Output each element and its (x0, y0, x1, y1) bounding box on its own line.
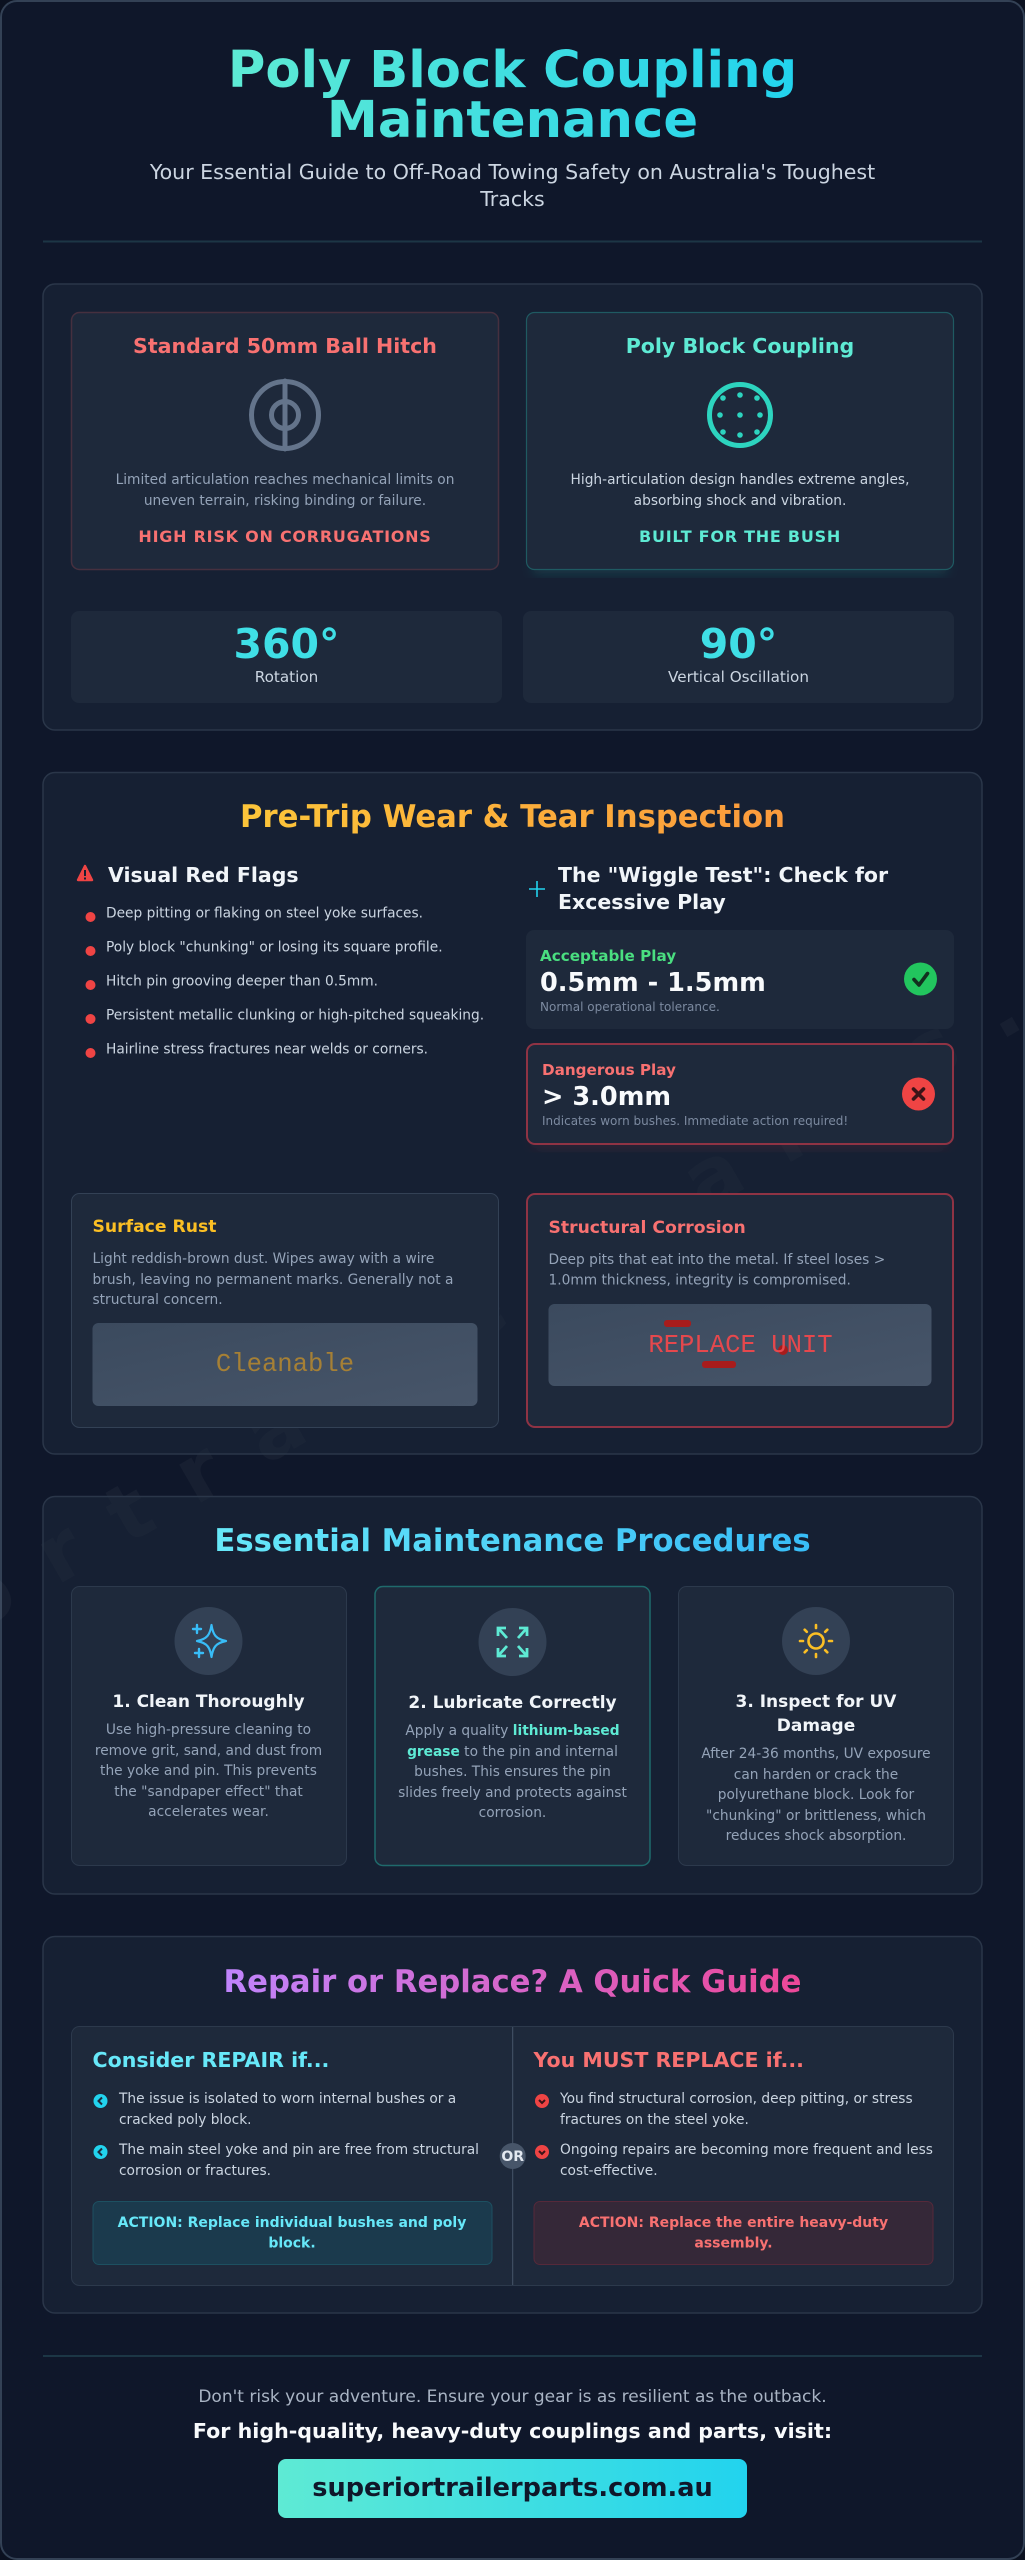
card: inspect for uv damage: polyurethane block. Look for (718, 1787, 915, 1803)
website button: superiortrailerparts.com.au (312, 2473, 713, 2503)
wiggle test (526, 863, 954, 1148)
card: standard 50mm ball hitch: Standard 50mm Ball Hitch (133, 334, 437, 358)
visual red flags: Visual Red Flags (108, 863, 299, 887)
action: repair: ACTION: Replace individual bushes and poly (118, 2215, 466, 2231)
action: replace: ACTION: Replace the entire heavy-duty (579, 2215, 888, 2231)
wiggle test: The "Wiggle Test": Check for (558, 863, 889, 887)
card: poly block coupling: BUILT FOR THE BUSH (639, 527, 841, 546)
column: repair: The main steel yoke and pin are free from structural (118, 2142, 479, 2158)
column: repair: The issue is isolated to worn internal bushes or a (118, 2091, 456, 2107)
icon: poly block (710, 384, 770, 446)
card: poly block coupling (526, 312, 954, 574)
or badge (500, 2143, 526, 2169)
panel: hitch comparison (43, 284, 982, 730)
card: clean thoroughly: remove grit, sand, and dust from (95, 1743, 322, 1759)
dangerous play: Indicates worn bushes. Immediate action required! (542, 1114, 848, 1128)
dangerous play (527, 1044, 953, 1148)
column: replace: fractures on the steel yoke. (560, 2112, 749, 2128)
panel: pre-trip inspection (43, 772, 982, 1454)
card: lubricate correctly: 2. Lubricate Correctly (408, 1693, 617, 1713)
card: surface rust (72, 1194, 498, 1428)
card: clean thoroughly (72, 1586, 346, 1866)
card: surface rust: structural concern. (92, 1292, 223, 1308)
column: repair: Consider REPAIR if... (92, 2048, 329, 2072)
visual red flags (78, 863, 484, 1058)
icon: plus (529, 881, 545, 897)
acceptable play (526, 930, 954, 1029)
swatch: cleanable: Cleanable (216, 1350, 354, 1379)
card: clean thoroughly: the "sandpaper effect" that (114, 1784, 303, 1800)
swatch: replace unit: REPLACE UNIT (648, 1331, 833, 1360)
heading: Repair or Replace? A Quick Guide (224, 1965, 801, 2000)
card: poly block coupling: absorbing shock and vibration. (634, 493, 846, 509)
card: lubricate correctly: corrosion. (479, 1805, 546, 1821)
acceptable play: Acceptable Play (540, 947, 676, 965)
card: standard 50mm ball hitch: Limited articulation reaches mechanical limits on (116, 472, 454, 488)
subtitle: Your Essential Guide to Off-Road Towing Safety on Australia's Toughest (149, 160, 875, 184)
icon: cross (902, 1078, 935, 1110)
card: lubricate correctly (375, 1586, 650, 1866)
title (228, 40, 797, 150)
card: standard 50mm ball hitch (72, 312, 498, 570)
title: Poly Block Coupling (228, 40, 797, 100)
card: lubricate correctly: bushes. This ensures the pin (414, 1764, 611, 1780)
card: inspect for uv damage: can harden or crack the (734, 1767, 898, 1783)
icon: check (904, 962, 937, 996)
icon: repair bullet (94, 2094, 108, 2108)
card: surface rust: brush, leaving no permanent marks. Generally not a (92, 1272, 453, 1288)
icon: repair bullet (94, 2145, 108, 2159)
card: poly block coupling: Poly Block Coupling (626, 334, 854, 358)
stat: vertical oscillation: Vertical Oscillation (668, 668, 809, 686)
card: structural corrosion: Deep pits that eat into the metal. If steel loses > (548, 1252, 885, 1268)
icon: expand arrows (478, 1608, 546, 1676)
card: clean thoroughly: Use high-pressure cleaning to (106, 1722, 311, 1738)
card: inspect for uv damage: reduces shock absorption. (726, 1828, 906, 1844)
column: replace: You MUST REPLACE if... (532, 2048, 804, 2072)
heading: Essential Maintenance Procedures (214, 1524, 811, 1559)
swatch: cleanable (92, 1323, 478, 1406)
title: Maintenance (327, 90, 698, 150)
header (149, 40, 875, 211)
card: inspect for uv damage: After 24-36 months, UV exposure (701, 1746, 931, 1762)
icon: warning triangle (78, 866, 92, 880)
website button (278, 2459, 747, 2518)
card: lubricate correctly: slides freely and protects against (398, 1785, 627, 1801)
action: repair (93, 2202, 492, 2264)
action: replace: assembly. (694, 2236, 773, 2252)
card: poly block coupling: High-articulation design handles extreme angles, (571, 472, 909, 488)
card: standard 50mm ball hitch: uneven terrain, risking binding or failure. (144, 493, 426, 509)
footer: For high-quality, heavy-duty couplings and parts, visit: (193, 2419, 832, 2443)
stat: rotation: Rotation (255, 668, 318, 686)
card: clean thoroughly: accelerates wear. (148, 1804, 269, 1820)
card: surface rust: Light reddish-brown dust. Wipes away with a wire (92, 1251, 434, 1267)
stat: vertical oscillation: 90° (700, 620, 777, 668)
action: repair: block. (268, 2236, 316, 2252)
red flag list (86, 906, 484, 1058)
card: lubricate correctly: Apply a quality lithium-based (405, 1723, 620, 1739)
heading: Pre-Trip Wear & Tear Inspection (240, 800, 785, 835)
subtitle (149, 160, 875, 211)
footer (193, 2387, 832, 2518)
swatch: replace unit (548, 1304, 932, 1386)
red flag list: Hitch pin grooving deeper than 0.5mm. (106, 974, 378, 990)
column: replace (532, 2048, 933, 2264)
red flag list: Deep pitting or flaking on steel yoke surfaces. (106, 906, 423, 922)
comparison box (72, 2026, 954, 2286)
panel: repair or replace (43, 1936, 982, 2313)
red flag list: Poly block "chunking" or losing its square profile. (106, 940, 443, 956)
card: inspect for uv damage: Damage (777, 1716, 855, 1736)
column: replace: Ongoing repairs are becoming more frequent and less (560, 2142, 933, 2158)
card: inspect for uv damage (678, 1586, 954, 1866)
stat: rotation (71, 611, 502, 703)
footer: Don't risk your adventure. Ensure your gear is as resilient as the outback. (198, 2387, 827, 2407)
column: repair (92, 2048, 492, 2264)
column: repair: corrosion or fractures. (119, 2163, 271, 2179)
card: structural corrosion (527, 1194, 953, 1427)
panel: maintenance procedures (43, 1496, 982, 1894)
card: structural corrosion: Structural Corrosion (548, 1218, 746, 1238)
icon: replace bullet (535, 2094, 549, 2108)
wiggle test: Excessive Play (558, 890, 726, 914)
column: replace: cost-effective. (560, 2163, 658, 2179)
card: lubricate correctly: grease to the pin and internal (407, 1744, 618, 1760)
icon: ball hitch (252, 381, 318, 449)
red flag list: Hairline stress fractures near welds or corners. (106, 1042, 428, 1058)
red flag list: Persistent metallic clunking or high-pitched squeaking. (106, 1008, 484, 1024)
acceptable play: Normal operational tolerance. (540, 1000, 720, 1014)
dangerous play: Dangerous Play (542, 1061, 676, 1079)
card: structural corrosion: 1.0mm thickness, integrity is compromised. (548, 1272, 851, 1288)
subtitle: Tracks (479, 187, 545, 211)
card: inspect for uv damage: "chunking" or brittleness, which (706, 1808, 926, 1824)
column: replace: You find structural corrosion, deep pitting, or stress (559, 2091, 913, 2107)
card: inspect for uv damage: 3. Inspect for UV (736, 1692, 897, 1712)
card: clean thoroughly: 1. Clean Thoroughly (112, 1692, 305, 1712)
card: standard 50mm ball hitch: HIGH RISK ON CORRUGATIONS (138, 527, 432, 546)
acceptable play: 0.5mm - 1.5mm (540, 968, 766, 998)
icon: sparkles (174, 1607, 242, 1675)
or badge: OR (501, 2149, 524, 2165)
column: repair: cracked poly block. (119, 2112, 252, 2128)
action: replace (534, 2202, 933, 2264)
stat: vertical oscillation (523, 611, 954, 703)
icon: replace bullet (535, 2145, 549, 2159)
stat: rotation: 360° (233, 620, 340, 668)
card: surface rust: Surface Rust (92, 1217, 216, 1237)
icon: sun (782, 1607, 850, 1675)
card: clean thoroughly: the yoke and pin. This prevents (100, 1763, 317, 1779)
dangerous play: > 3.0mm (542, 1082, 671, 1112)
